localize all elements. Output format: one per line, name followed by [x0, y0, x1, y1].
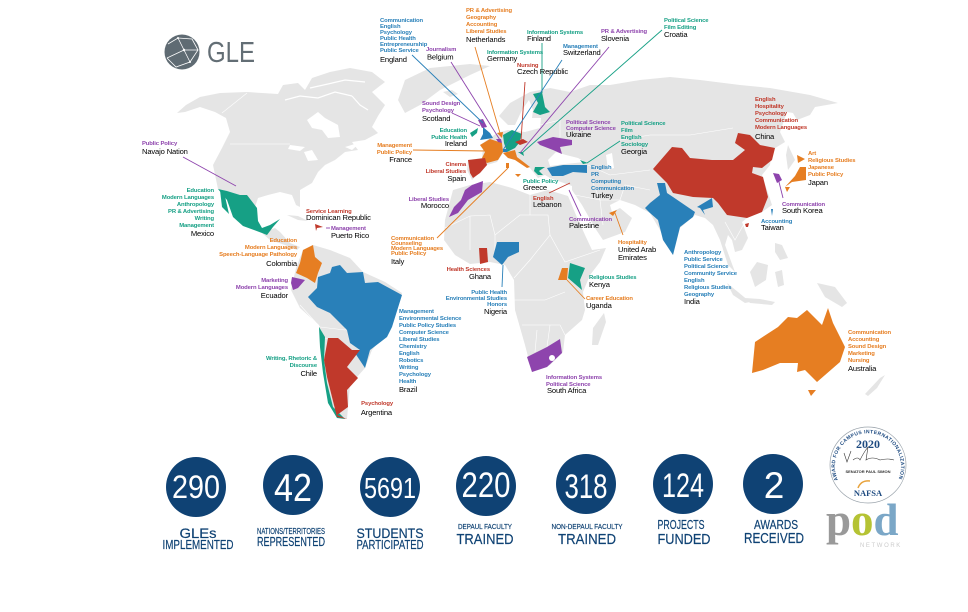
label: Australia: Communication: [848, 330, 891, 336]
label: Georgia: [621, 121, 666, 156]
label: Slovenia: [601, 29, 647, 43]
label: Czech Republic: Nursing: [517, 63, 539, 69]
label: United Arab Emirates: [618, 240, 656, 262]
stat: 124 projects funded: [653, 454, 713, 548]
label: Argentina: Argentina: [361, 408, 393, 417]
label: China: China: [755, 132, 775, 141]
country: South Africa: [527, 339, 562, 372]
label: South Korea: South Korea: [782, 206, 823, 215]
country: Georgia: [580, 160, 588, 164]
label: Navajo Nation: [142, 141, 188, 156]
country: Switzerland: [503, 149, 508, 152]
label: Australia: [848, 330, 891, 373]
country: Netherlands: [497, 132, 503, 138]
label: Brazil: Liberal Studies: [399, 337, 440, 343]
label: Finland: [527, 30, 584, 43]
label: Puerto Rico: Management: [331, 226, 366, 232]
label: Turkey: Turkey: [591, 191, 613, 200]
logo wordmark: GLE: [207, 37, 255, 69]
label: Germany: Information Systems: [487, 50, 544, 56]
label: Ireland: Public Health: [431, 135, 468, 141]
country: India: [645, 183, 713, 255]
stat: 2 awards received: [743, 454, 804, 547]
label: Navajo Nation: Navajo Nation: [142, 147, 188, 156]
label: Mexico: Education: [187, 188, 215, 194]
label: Ireland: [431, 128, 468, 148]
label: Japan: [808, 151, 856, 187]
label: Australia: Sound Design: [848, 344, 887, 350]
label: Ecuador: [236, 278, 289, 300]
label: Spain: Cinema: [445, 162, 467, 168]
stat: 5691 students participated: STUDENTS: [356, 525, 424, 541]
stat: 2 awards received: AWARDS: [754, 518, 798, 532]
label: Italy: Public Policy: [391, 251, 427, 257]
label: Ireland: Ireland: [445, 139, 467, 148]
label: Mexico: Mexico: [191, 229, 214, 238]
label: China: [755, 97, 808, 141]
country: Italy: [503, 150, 530, 177]
label: Netherlands: [466, 8, 512, 44]
label: Brazil: Public Policy Studies: [399, 323, 457, 329]
badge: 2020 Senator Paul Simon award, NAFSA: SENATOR PAUL SIMON: [845, 469, 891, 474]
label: United Arab Emirates: Hospitality: [618, 240, 648, 246]
label: Turkey: [591, 165, 634, 200]
label: Turkey: English: [591, 165, 612, 171]
stat: 2 awards received: 2: [764, 465, 784, 506]
label: Ukraine: Ukraine: [566, 130, 591, 139]
country borders: [222, 93, 745, 352]
label: Netherlands: Geography: [466, 15, 497, 21]
country: Argentina: [324, 338, 360, 419]
country: Ukraine: [537, 137, 572, 154]
label: England: Psychology: [380, 30, 413, 36]
label: Mexico: Modern Languages: [162, 195, 215, 201]
label: Mexico: Management: [179, 223, 214, 229]
label: Mexico: [162, 188, 215, 238]
label: Georgia: Georgia: [621, 147, 648, 156]
stat: 42 nations/territories represented: [257, 455, 325, 549]
label: Taiwan: Accounting: [761, 219, 793, 225]
stat: 5691 students participated: [356, 457, 424, 552]
stat: 42 nations/territories represented: REPRESENTED: [257, 535, 325, 549]
label: Turkey: Communication: [591, 186, 634, 192]
label: Croatia: Croatia: [664, 30, 688, 39]
country: Belgium: [496, 139, 502, 143]
label: Italy: [391, 236, 444, 266]
stat: 220 DePaul faculty trained: TRAINED: [456, 531, 514, 548]
country: Germany: [503, 130, 522, 152]
label: United Arab Emirates: United Arab: [618, 245, 656, 254]
label: Dominican Republic: Service Learning: [306, 209, 352, 215]
label: Germany: Germany: [487, 54, 518, 63]
label: Brazil: Psychology: [399, 372, 432, 378]
label: Morocco: Liberal Studies: [409, 197, 450, 203]
label: Argentina: [361, 401, 394, 417]
label: Finland: Finland: [527, 34, 551, 43]
label: South Africa: South Africa: [547, 386, 587, 395]
label: Japan: Public Policy: [808, 172, 844, 178]
label: South Korea: Communication: [782, 202, 825, 208]
label: India: India: [684, 297, 701, 306]
label: Lebanon: English: [533, 196, 554, 202]
label: Belgium: Journalism: [426, 47, 456, 53]
label: Australia: Australia: [848, 364, 877, 373]
label: England: [380, 18, 428, 64]
label: Ecuador: Ecuador: [261, 291, 289, 300]
stat: 220 DePaul faculty trained: [456, 456, 516, 548]
stat: 5691 students participated: PARTICIPATED: [356, 537, 424, 552]
badge: 2020 Senator Paul Simon award, NAFSA: 2020: [856, 437, 880, 451]
stat: 318 non-DePaul faculty trained: [552, 454, 622, 548]
label: Germany: [487, 50, 544, 63]
label: Ghana: [447, 267, 492, 281]
label: Spain: Spain: [447, 174, 466, 183]
label: Nigeria: Public Health: [471, 290, 508, 296]
label: Slovenia: Slovenia: [601, 34, 630, 43]
label: Uganda: Uganda: [586, 301, 613, 310]
label: Taiwan: [761, 219, 793, 232]
country: Nigeria: [493, 242, 519, 265]
label: Brazil: Environmental Science: [399, 316, 462, 322]
label: Scotland: [422, 101, 461, 123]
label: Brazil: Computer Science: [399, 330, 450, 336]
label: Switzerland: Switzerland: [563, 48, 601, 57]
label: Czech Republic: Czech Republic: [517, 67, 568, 76]
country: Ecuador: [291, 277, 305, 290]
stat: 124 projects funded: 124: [662, 467, 704, 505]
label: China: Communication: [755, 118, 798, 124]
icon: network globe: [164, 34, 200, 70]
label: India: Community Service: [684, 271, 738, 277]
label: England: English: [380, 24, 401, 30]
country: Ghana: [479, 248, 488, 264]
label: India: Political Science: [684, 264, 729, 270]
label: Palestine: Palestine: [569, 221, 599, 230]
label: Scotland: Scotland: [422, 114, 450, 123]
label: Brazil: Management: [399, 309, 434, 315]
badge: 2020 Senator Paul Simon award, NAFSA: AWARD FOR CAMPUS INTERNATIONALIZATION: [832, 430, 904, 480]
label: Dominican Republic: [306, 209, 371, 222]
label: Brazil: Chemistry: [399, 344, 428, 350]
label: Colombia: Colombia: [266, 259, 298, 268]
label: Ukraine: Political Science: [566, 120, 611, 126]
label: Japan: Religious Studies: [808, 158, 856, 164]
world map base: [177, 64, 885, 419]
label: Chile: Writing, Rhetoric &: [266, 356, 318, 362]
label: Brazil: [399, 309, 462, 394]
stat: 2 awards received: RECEIVED: [744, 531, 804, 547]
label: Argentina: Psychology: [361, 401, 394, 407]
country: South Korea: [773, 173, 782, 183]
label: Netherlands: Accounting: [466, 22, 498, 28]
label: Kenya: Religious Studies: [589, 275, 637, 281]
stat: 318 non-DePaul faculty trained: 318: [564, 468, 608, 506]
stat: 42 nations/territories represented: NATIONS/TERRITORIES: [257, 527, 325, 536]
label: Navajo Nation: Public Policy: [142, 141, 178, 147]
label: India: English: [684, 278, 705, 284]
stat: 318 non-DePaul faculty trained: TRAINED: [558, 531, 616, 548]
label: South Africa: Political Science: [546, 382, 591, 388]
label: Australia: Marketing: [848, 351, 875, 357]
country: Chile: [319, 327, 345, 419]
label: Japan: Japan: [808, 178, 828, 187]
label: Ghana: Health Sciences: [447, 267, 491, 273]
label: Colombia: Modern Languages: [245, 245, 298, 251]
label: England: Entrepreneurship: [380, 42, 428, 48]
label: Uganda: [586, 296, 633, 310]
label: Dominican Republic: Dominican Republic: [306, 213, 371, 222]
label: Taiwan: Taiwan: [761, 223, 784, 232]
label: Colombia: [219, 238, 298, 268]
label: Italy: Italy: [391, 257, 405, 266]
label: Palestine: Communication: [569, 217, 612, 223]
label: China: Psychology: [755, 111, 788, 117]
label: Georgia: Sociology: [621, 142, 649, 148]
country: Scotland: [478, 119, 487, 128]
label: Ecuador: Modern Languages: [236, 285, 289, 291]
stat: 124 projects funded: FUNDED: [658, 531, 711, 548]
stat: 318 non-DePaul faculty trained: NON-DEPAUL FACULTY: [552, 522, 622, 531]
label: France: Management: [377, 143, 412, 149]
label: Slovenia: PR & Advertising: [601, 29, 647, 35]
country: Spain: [468, 158, 487, 178]
label: Greece: Public Policy: [523, 179, 559, 185]
label: Croatia: Political Science: [664, 18, 709, 24]
logo: GLE: [164, 34, 255, 70]
label: Belgium: [426, 47, 456, 62]
stat: 290 GLEs implemented: 290: [172, 469, 220, 505]
stat: 220 DePaul faculty trained: DEPAUL FACULTY: [458, 522, 512, 531]
label: Puerto Rico: Puerto Rico: [331, 231, 369, 240]
label: Ghana: Ghana: [469, 272, 492, 281]
country: Mexico: [218, 189, 280, 235]
label: France: [377, 143, 413, 164]
country: Dominican Republic: [315, 224, 323, 231]
country: Kenya: [568, 263, 585, 290]
label: Colombia: Education: [270, 238, 298, 244]
label: England: Public Health: [380, 36, 416, 42]
label: Nigeria: Honors: [487, 302, 508, 308]
label: Mexico: Anthropology: [177, 202, 215, 208]
label: Nigeria: [446, 290, 508, 316]
label: Japan: Art: [808, 151, 816, 157]
label: Chile: [266, 356, 318, 378]
label: Italy: Modern Languages: [391, 246, 444, 252]
label: Scotland: Sound Design: [422, 101, 461, 107]
label: Italy: Communication: [391, 236, 434, 242]
label: China: Modern Languages: [755, 125, 808, 131]
stat: 5691 students participated: 5691: [364, 473, 416, 505]
arctic channels: [285, 80, 368, 110]
label: India: Geography: [684, 292, 715, 298]
country: Morocco: [449, 181, 483, 217]
label: Spain: [426, 162, 467, 183]
leader lines: [183, 30, 783, 299]
label: India: Public Service: [684, 257, 723, 263]
stat: 290 GLEs implemented: GLEs: [180, 525, 216, 541]
inland seas and lakes: [288, 112, 614, 170]
label: Finland: Information Systems: [527, 30, 584, 36]
label: Turkey: PR: [591, 172, 600, 178]
label: Ukraine: Computer Science: [566, 126, 617, 132]
country: Australia: [752, 308, 845, 396]
label: Mexico: PR & Advertising: [168, 209, 215, 215]
label: Japan: Japanese: [808, 165, 835, 171]
label: Brazil: Brazil: [399, 385, 418, 394]
label: China: Hospitality: [755, 104, 785, 110]
label: Kenya: [589, 275, 637, 289]
label: Chile: Discourse: [290, 363, 318, 369]
logo: POD Network: pod: [826, 495, 899, 545]
label: South Korea: [782, 202, 825, 215]
country: Colombia: [296, 245, 322, 283]
label: China: English: [755, 97, 776, 103]
label: Brazil: English: [399, 351, 420, 357]
country: Brazil: [308, 265, 402, 368]
label: Georgia: English: [621, 135, 642, 141]
logo: POD Network: NETWORK: [860, 543, 902, 549]
label: India: Anthropology: [684, 250, 722, 256]
label: Scotland: Psychology: [422, 108, 455, 114]
label: Turkey: Computing: [591, 179, 622, 185]
country: Taiwan: [771, 209, 773, 216]
country: United Arab Emirates: [609, 210, 617, 216]
label: Greece: [523, 179, 559, 192]
label: Chile: Chile: [300, 369, 317, 378]
label: England: Communication: [380, 18, 423, 24]
label: United Arab Emirates: Emirates: [618, 253, 647, 262]
label: France: France: [389, 155, 412, 164]
country: Greece: [534, 167, 545, 175]
stat: 220 DePaul faculty trained: 220: [462, 466, 510, 505]
country: Turkey: [547, 165, 587, 176]
label: Italy: Counseling: [391, 241, 422, 247]
label: Brazil: Health: [399, 379, 417, 385]
country: England: [480, 127, 493, 140]
label: Switzerland: [563, 44, 601, 57]
highlighted countries: [218, 92, 845, 419]
label: Georgia: Political Science: [621, 121, 666, 127]
label: Croatia: [664, 18, 709, 39]
label: Ukraine: [566, 120, 617, 139]
stat: 290 GLEs implemented: [162, 457, 234, 552]
label: Lebanon: [533, 196, 562, 209]
label: Ecuador: Marketing: [261, 278, 289, 284]
label: Nigeria: Nigeria: [484, 307, 508, 316]
label: France: Public Policy: [377, 150, 413, 156]
label: Puerto Rico: [331, 226, 369, 240]
label: England: England: [380, 55, 407, 64]
label: South Africa: Information Systems: [546, 375, 603, 381]
label: Croatia: Film Editing: [664, 25, 697, 31]
label: Spain: Liberal Studies: [426, 169, 467, 175]
label: India: [684, 250, 738, 306]
badge: 2020 Senator Paul Simon award, NAFSA: [830, 426, 906, 504]
label: Colombia: Speech-Language Pathology: [219, 252, 298, 258]
label: Palestine: [569, 217, 612, 230]
label: Mexico: Writing: [195, 216, 215, 222]
signature: [844, 447, 894, 462]
label: Australia: Nursing: [848, 358, 870, 364]
country: Finland: [533, 92, 550, 115]
label: Lebanon: Lebanon: [533, 200, 562, 209]
label: Morocco: [409, 197, 450, 210]
country: China: [653, 133, 775, 227]
country: Japan: [785, 155, 806, 192]
label: Czech Republic: [517, 63, 568, 76]
label: Uganda: Career Education: [586, 296, 633, 302]
country: France: [480, 139, 503, 163]
label: Nigeria: Environmental Studies: [446, 296, 508, 302]
label: Belgium: Belgium: [427, 52, 453, 62]
country: Czech Republic: [515, 139, 528, 145]
label: Switzerland: Management: [563, 44, 598, 50]
label: Ireland: Education: [440, 128, 468, 134]
stat: 290 GLEs implemented: IMPLEMENTED: [162, 537, 234, 552]
stat: 42 nations/territories represented: 42: [274, 467, 312, 510]
label: Morocco: Morocco: [421, 201, 449, 210]
label: Netherlands: Liberal Studies: [466, 29, 507, 35]
label: India: Religious Studies: [684, 285, 732, 291]
stat: 124 projects funded: PROJECTS: [658, 518, 704, 532]
label: Australia: Accounting: [848, 337, 880, 343]
label: Brazil: Robotics: [399, 358, 424, 364]
label: Kenya: Kenya: [589, 280, 611, 289]
label: Netherlands: PR & Advertising: [466, 8, 512, 14]
label: Brazil: Writing: [399, 365, 419, 371]
country: Ireland: [470, 128, 478, 137]
badge: 2020 Senator Paul Simon award, NAFSA: NAFSA: [854, 488, 883, 498]
label: Georgia: Film: [621, 128, 633, 134]
label: South Africa: [546, 375, 603, 395]
country: Croatia: [518, 152, 524, 156]
label: England: Public Service: [380, 48, 419, 54]
label: Netherlands: Netherlands: [466, 35, 506, 44]
labels: [142, 8, 891, 417]
country: Uganda: [558, 268, 568, 280]
label: Greece: Greece: [523, 183, 547, 192]
